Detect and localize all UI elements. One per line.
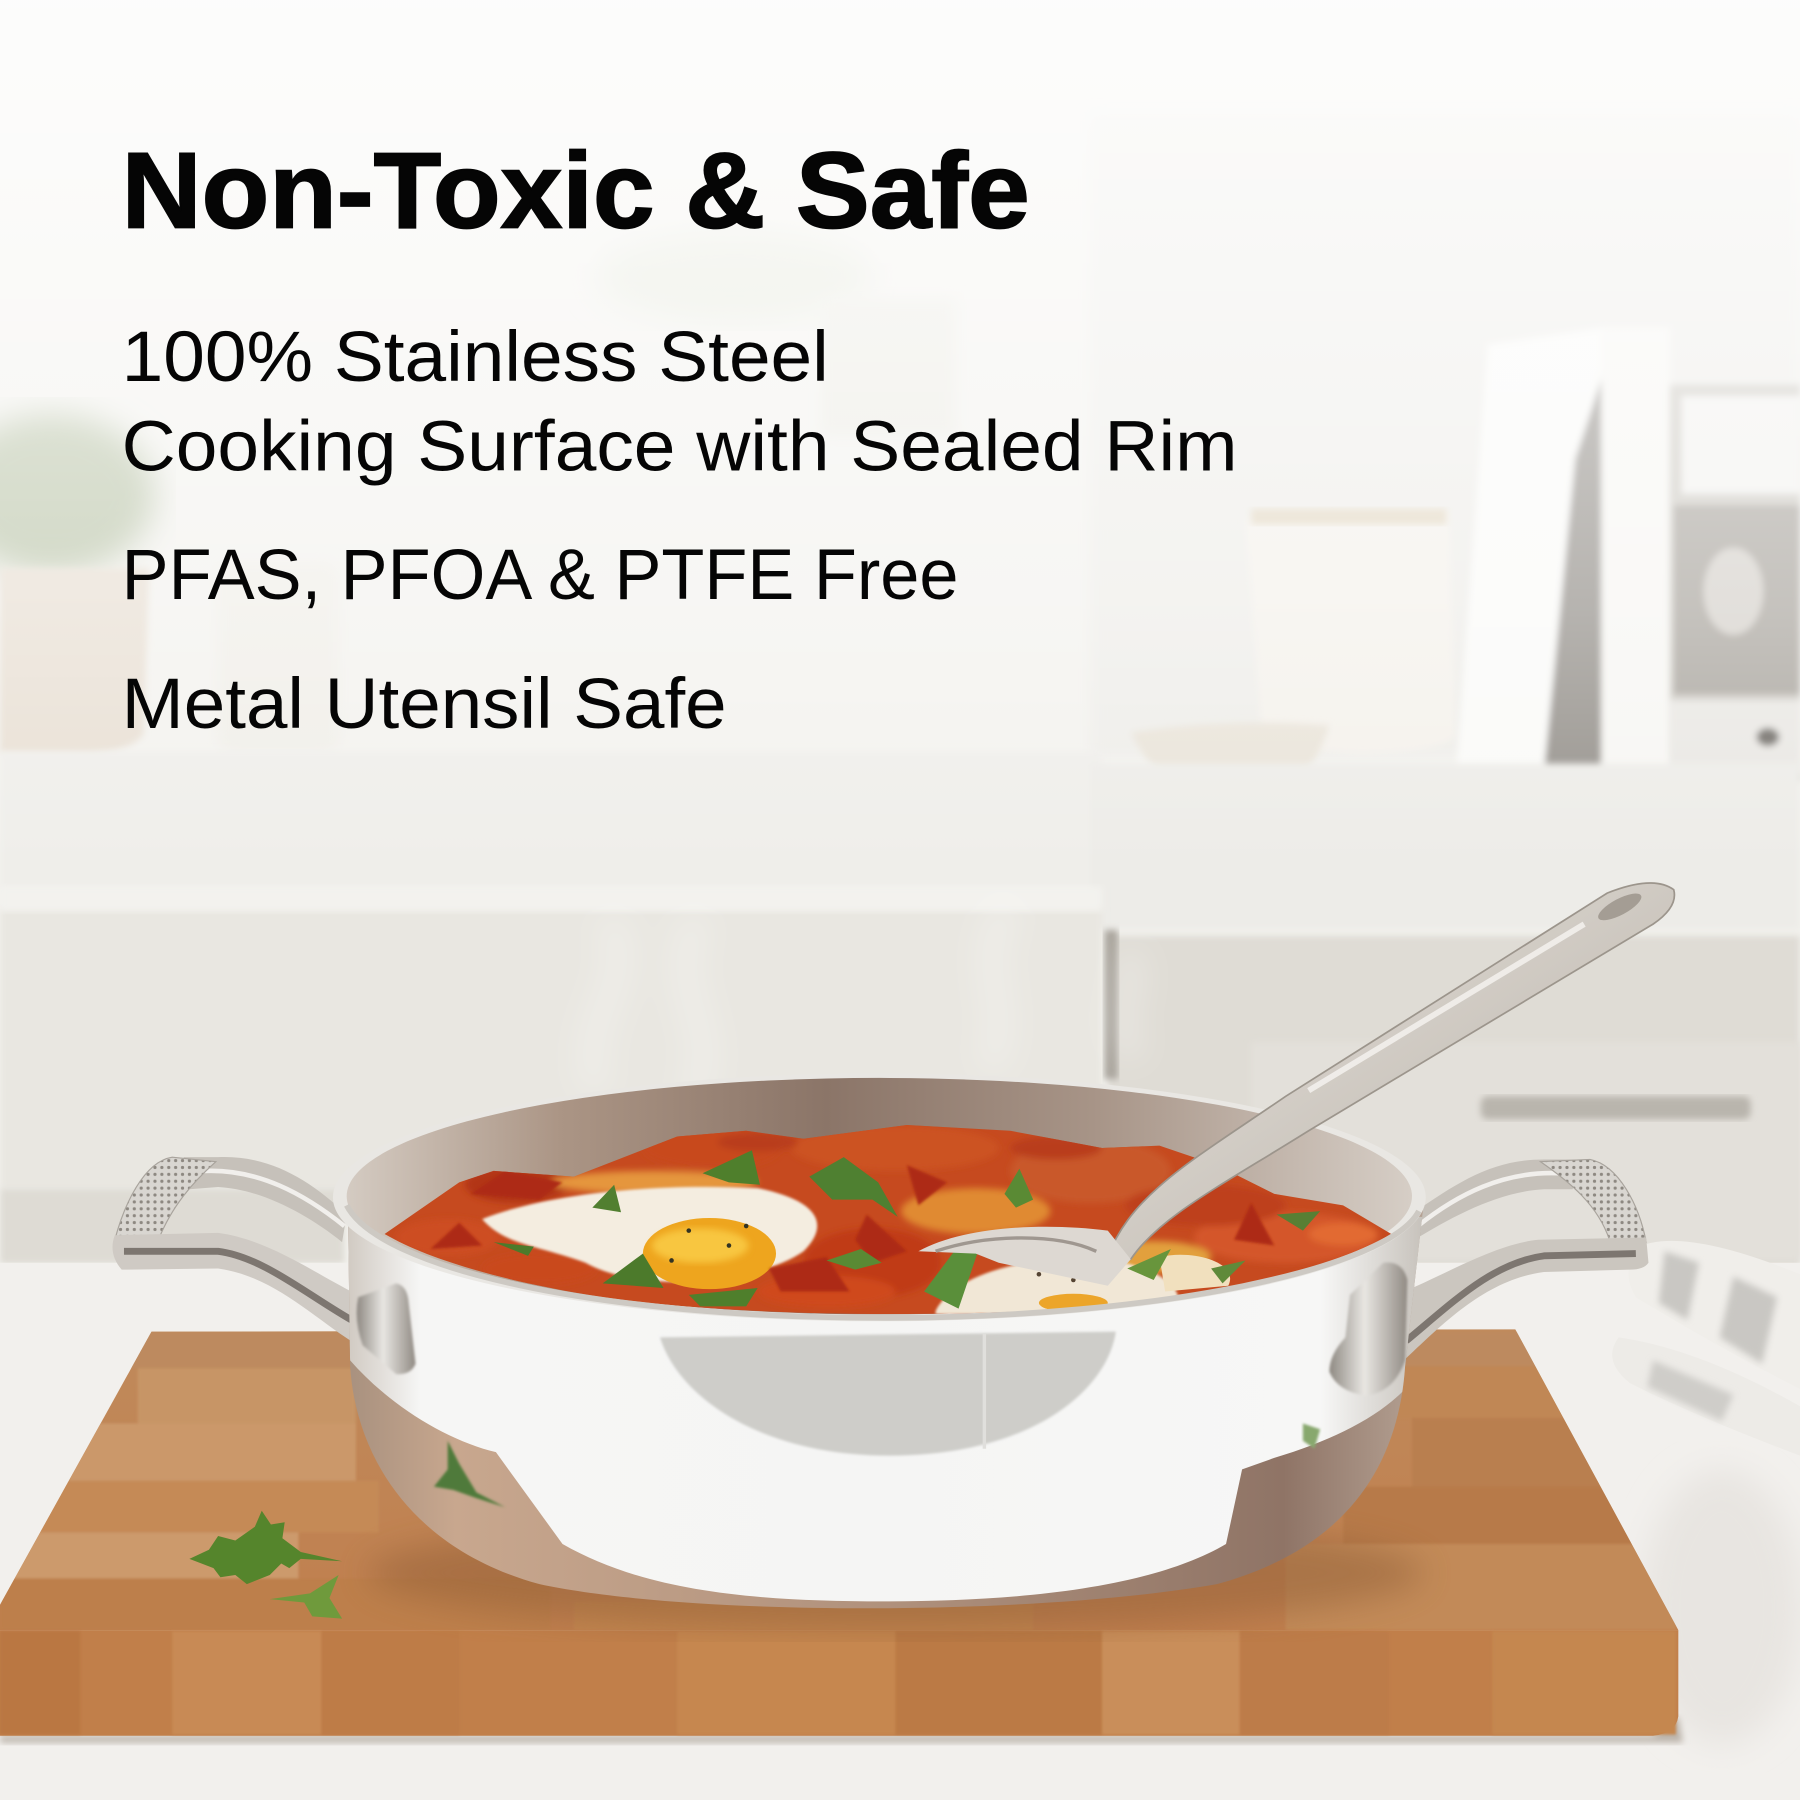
egg white right	[936, 1258, 1178, 1314]
textured grip	[115, 1157, 216, 1240]
lower arm	[1366, 1238, 1648, 1361]
herbs in sauce	[703, 1150, 760, 1185]
board front face	[0, 1630, 1678, 1736]
feature: PFAS free: PFAS, PFOA & PTFE Free	[122, 536, 959, 615]
right handle rivet plate	[1329, 1263, 1407, 1396]
back counter	[0, 752, 1102, 890]
feature: stainless steel surface: Cooking Surface with Sealed Rim	[122, 408, 1238, 487]
feature: stainless steel surface	[122, 318, 1237, 487]
wall panel	[1091, 115, 1800, 758]
lower arm	[112, 1233, 358, 1345]
countertop	[0, 1263, 1800, 1800]
pan rim front	[347, 1205, 1419, 1318]
books	[1456, 327, 1670, 781]
left handle rivet plate	[357, 1283, 416, 1374]
small bowl	[1131, 723, 1329, 801]
herb on board	[189, 1511, 342, 1619]
jar	[1246, 511, 1456, 753]
leaf reflection	[434, 1441, 505, 1507]
plant left	[0, 413, 155, 574]
egg yolk left	[643, 1218, 776, 1289]
pan exterior lower reflection	[348, 1205, 1423, 1608]
coffee maker	[1670, 385, 1800, 781]
faint vertical streak	[983, 1334, 986, 1449]
spoon hanging hole	[1595, 888, 1645, 925]
sink front	[0, 907, 1102, 1188]
bottle	[218, 562, 339, 752]
saute pan	[333, 1073, 1429, 1608]
plant pot left	[0, 568, 149, 753]
pepper and tomato chips	[430, 1165, 1274, 1291]
egg white left	[482, 1187, 817, 1282]
feature: metal utensil safe: Metal Utensil Safe	[122, 665, 727, 744]
feature: stainless steel surface: 100% Stainless Steel	[122, 318, 829, 397]
pan shadow on board	[367, 1515, 1423, 1630]
spoon bowl	[918, 1227, 1131, 1286]
upper arm	[184, 1157, 347, 1242]
cutting board	[0, 1329, 1722, 1743]
upper arm	[1414, 1159, 1578, 1240]
left handle	[112, 1157, 358, 1345]
white wash	[0, 0, 1800, 872]
spoon handle	[1108, 883, 1674, 1259]
pan interior	[347, 1078, 1412, 1314]
centre plant	[597, 230, 872, 321]
rim outer	[333, 1073, 1426, 1321]
title: Non-Toxic & Safe	[122, 129, 1030, 250]
food: tomato sauce	[384, 1125, 1391, 1314]
steam	[592, 907, 1136, 1102]
cabinets	[1108, 936, 1800, 1268]
board shadow	[0, 1716, 1683, 1743]
textured grip	[1541, 1159, 1646, 1242]
right handle	[1366, 1159, 1648, 1361]
kitchen towel	[1612, 1241, 1800, 1456]
gray reflection	[660, 1332, 1116, 1456]
pan exterior highlight	[344, 1217, 1429, 1601]
board top	[0, 1329, 1678, 1630]
serving spoon	[918, 883, 1674, 1286]
